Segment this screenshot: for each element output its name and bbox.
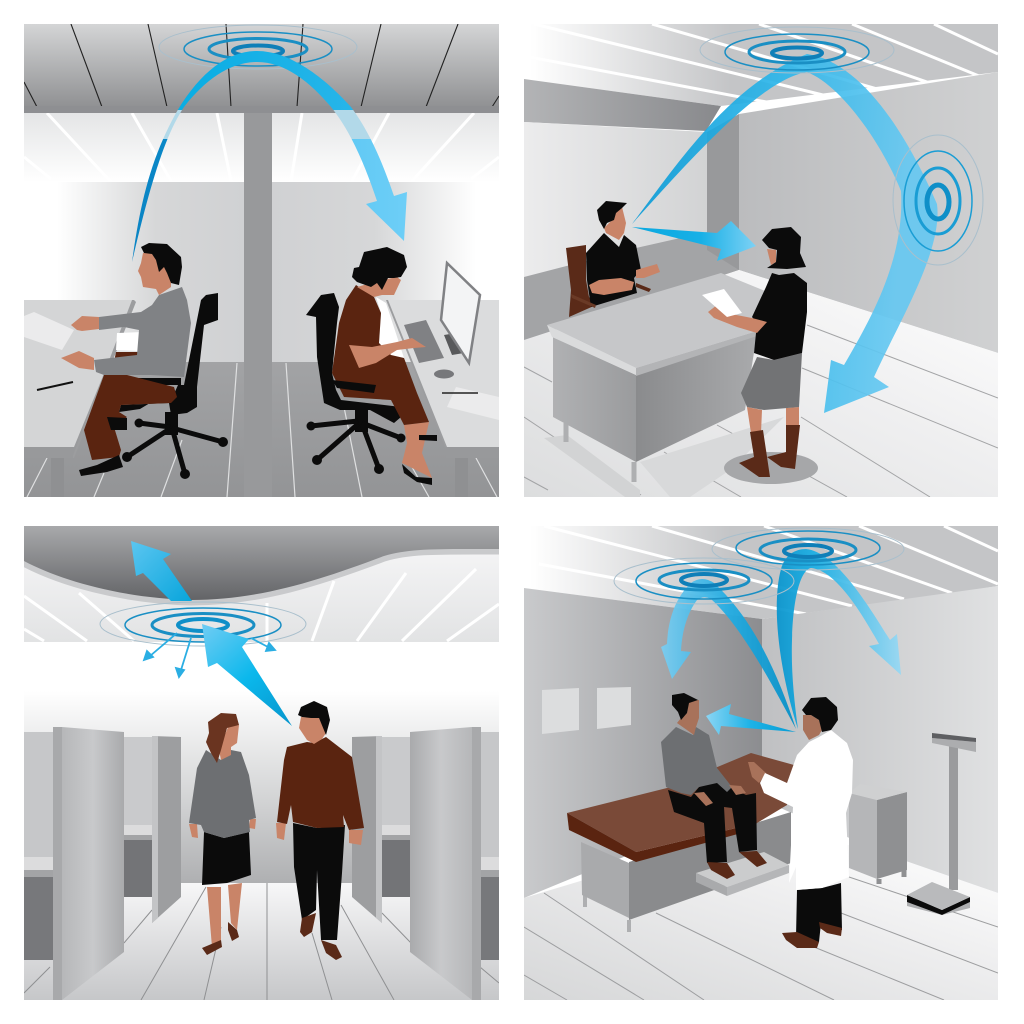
scale — [907, 733, 976, 915]
right wall — [739, 72, 998, 353]
floor — [524, 845, 998, 1000]
pillar — [707, 114, 739, 270]
lit ceiling — [24, 550, 499, 642]
back wall — [762, 586, 998, 893]
arrow: direct speech to patient — [706, 704, 796, 735]
standing woman — [702, 227, 807, 477]
arrows: small scattered reflections — [144, 633, 275, 677]
wall — [24, 642, 499, 887]
soffit — [524, 79, 721, 131]
dress — [332, 285, 429, 425]
arrow: reflected sound arc — [132, 51, 407, 262]
woman walking — [189, 713, 256, 955]
right cubicles — [352, 727, 499, 1000]
panel: exam room — [524, 526, 998, 1000]
office chair — [119, 293, 228, 479]
ceiling sound rings — [100, 602, 306, 646]
ceiling sound rings — [159, 25, 357, 69]
seated patient — [661, 693, 767, 879]
back walls — [77, 182, 244, 362]
floor shadows — [544, 435, 640, 497]
hands — [71, 316, 99, 331]
floor — [24, 362, 499, 497]
arrow: reflection to far side — [777, 549, 901, 729]
floor — [524, 270, 998, 497]
ceiling sound rings right — [712, 528, 904, 570]
trousers — [84, 375, 177, 460]
seated man left — [61, 243, 228, 479]
arrow: sound passing through ceiling — [131, 541, 192, 601]
man walking — [276, 701, 364, 960]
wall sound rings — [893, 135, 983, 265]
panel: hallway with wavy ceiling — [24, 526, 499, 1000]
wall pictures — [542, 687, 631, 734]
seated man with chair — [566, 201, 660, 317]
head — [357, 277, 401, 297]
ceiling sound rings — [700, 27, 894, 73]
desk — [547, 273, 775, 482]
arrow: direct sound to listener — [632, 221, 756, 261]
back wall — [524, 122, 707, 290]
panel: open office desks with sound reflecting off ceiling — [24, 24, 499, 497]
wavy ceiling lip — [24, 549, 499, 600]
cabinet — [849, 784, 907, 884]
arrow: speech to ceiling — [202, 624, 292, 726]
sweater — [94, 287, 191, 377]
left wall — [524, 588, 762, 898]
left cubicles — [24, 727, 181, 1000]
exam table — [567, 753, 794, 932]
ceiling slab — [24, 24, 499, 108]
floor — [24, 883, 499, 1000]
head — [138, 252, 171, 295]
seated woman right — [306, 247, 437, 485]
low wall — [524, 232, 739, 345]
ceiling sound rings left — [614, 558, 794, 604]
ceiling with light strips — [524, 24, 998, 106]
panel: office reception desk — [524, 24, 998, 497]
arrow: reflection to patient — [661, 579, 796, 729]
legs and shoes — [402, 422, 432, 478]
lit ceiling zone — [24, 113, 499, 162]
desk right with monitor and keyboard — [386, 260, 499, 460]
wavy ceiling — [24, 526, 499, 600]
office chair — [306, 293, 406, 474]
arrow: sound to ceiling, wall and floor — [632, 54, 938, 413]
gap behind torso — [376, 297, 404, 358]
doctor — [748, 697, 853, 948]
arm — [349, 338, 426, 368]
desk left — [24, 300, 139, 460]
central column — [244, 113, 272, 380]
ceiling with light strips — [524, 526, 998, 619]
